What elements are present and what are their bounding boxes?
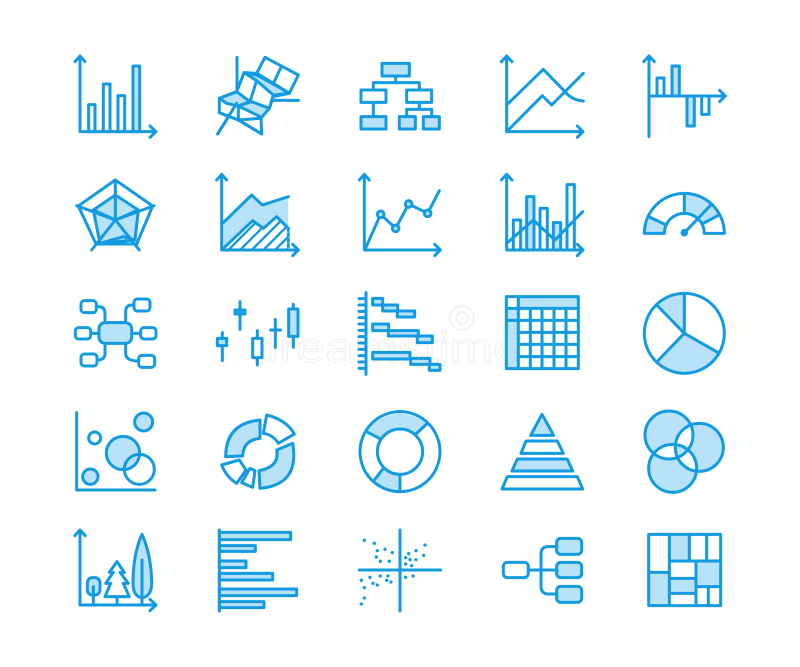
icon: mind map	[75, 299, 156, 367]
row 5, right icons	[503, 534, 721, 606]
icon: candlestick chart	[217, 302, 298, 365]
row 1 and 2, right icons	[501, 56, 725, 256]
icon: combo bar and line chart	[501, 174, 583, 256]
icon grid	[73, 54, 727, 612]
icon: 3D bar chart	[218, 57, 298, 134]
icon: radar chart	[77, 180, 154, 250]
icon: data table	[506, 297, 578, 369]
icon: multi line chart	[501, 56, 583, 137]
icon: tree comparison chart	[75, 530, 156, 611]
icon: exploded donut chart	[222, 415, 294, 488]
icon: line chart with points	[359, 174, 440, 256]
icon: donut chart	[360, 412, 440, 492]
icon: tree diagram	[503, 538, 582, 602]
icon: gauge	[644, 193, 724, 235]
watermark: dreamstime	[250, 324, 522, 371]
icon: gantt chart	[359, 293, 440, 374]
row 1 and 2, left icons	[75, 56, 440, 260]
icon: venn diagram	[645, 411, 723, 492]
icon: quadrant scatter plot	[359, 530, 441, 611]
icon: bubble chart	[77, 413, 155, 490]
row 3 and 4, left icons	[75, 293, 440, 492]
icon: positive and negative bar chart	[644, 56, 725, 137]
icon: org chart	[361, 63, 439, 129]
icon: area chart	[215, 172, 300, 258]
row 3 and 4, right icons	[502, 293, 724, 492]
icon: pie chart	[644, 293, 724, 373]
row 5, left icons	[75, 530, 441, 611]
watermark	[250, 306, 522, 371]
icon: pyramid chart	[502, 414, 583, 489]
icon: treemap	[649, 534, 721, 606]
icon: bar chart	[75, 56, 156, 137]
icon: horizontal bar chart	[219, 530, 297, 611]
